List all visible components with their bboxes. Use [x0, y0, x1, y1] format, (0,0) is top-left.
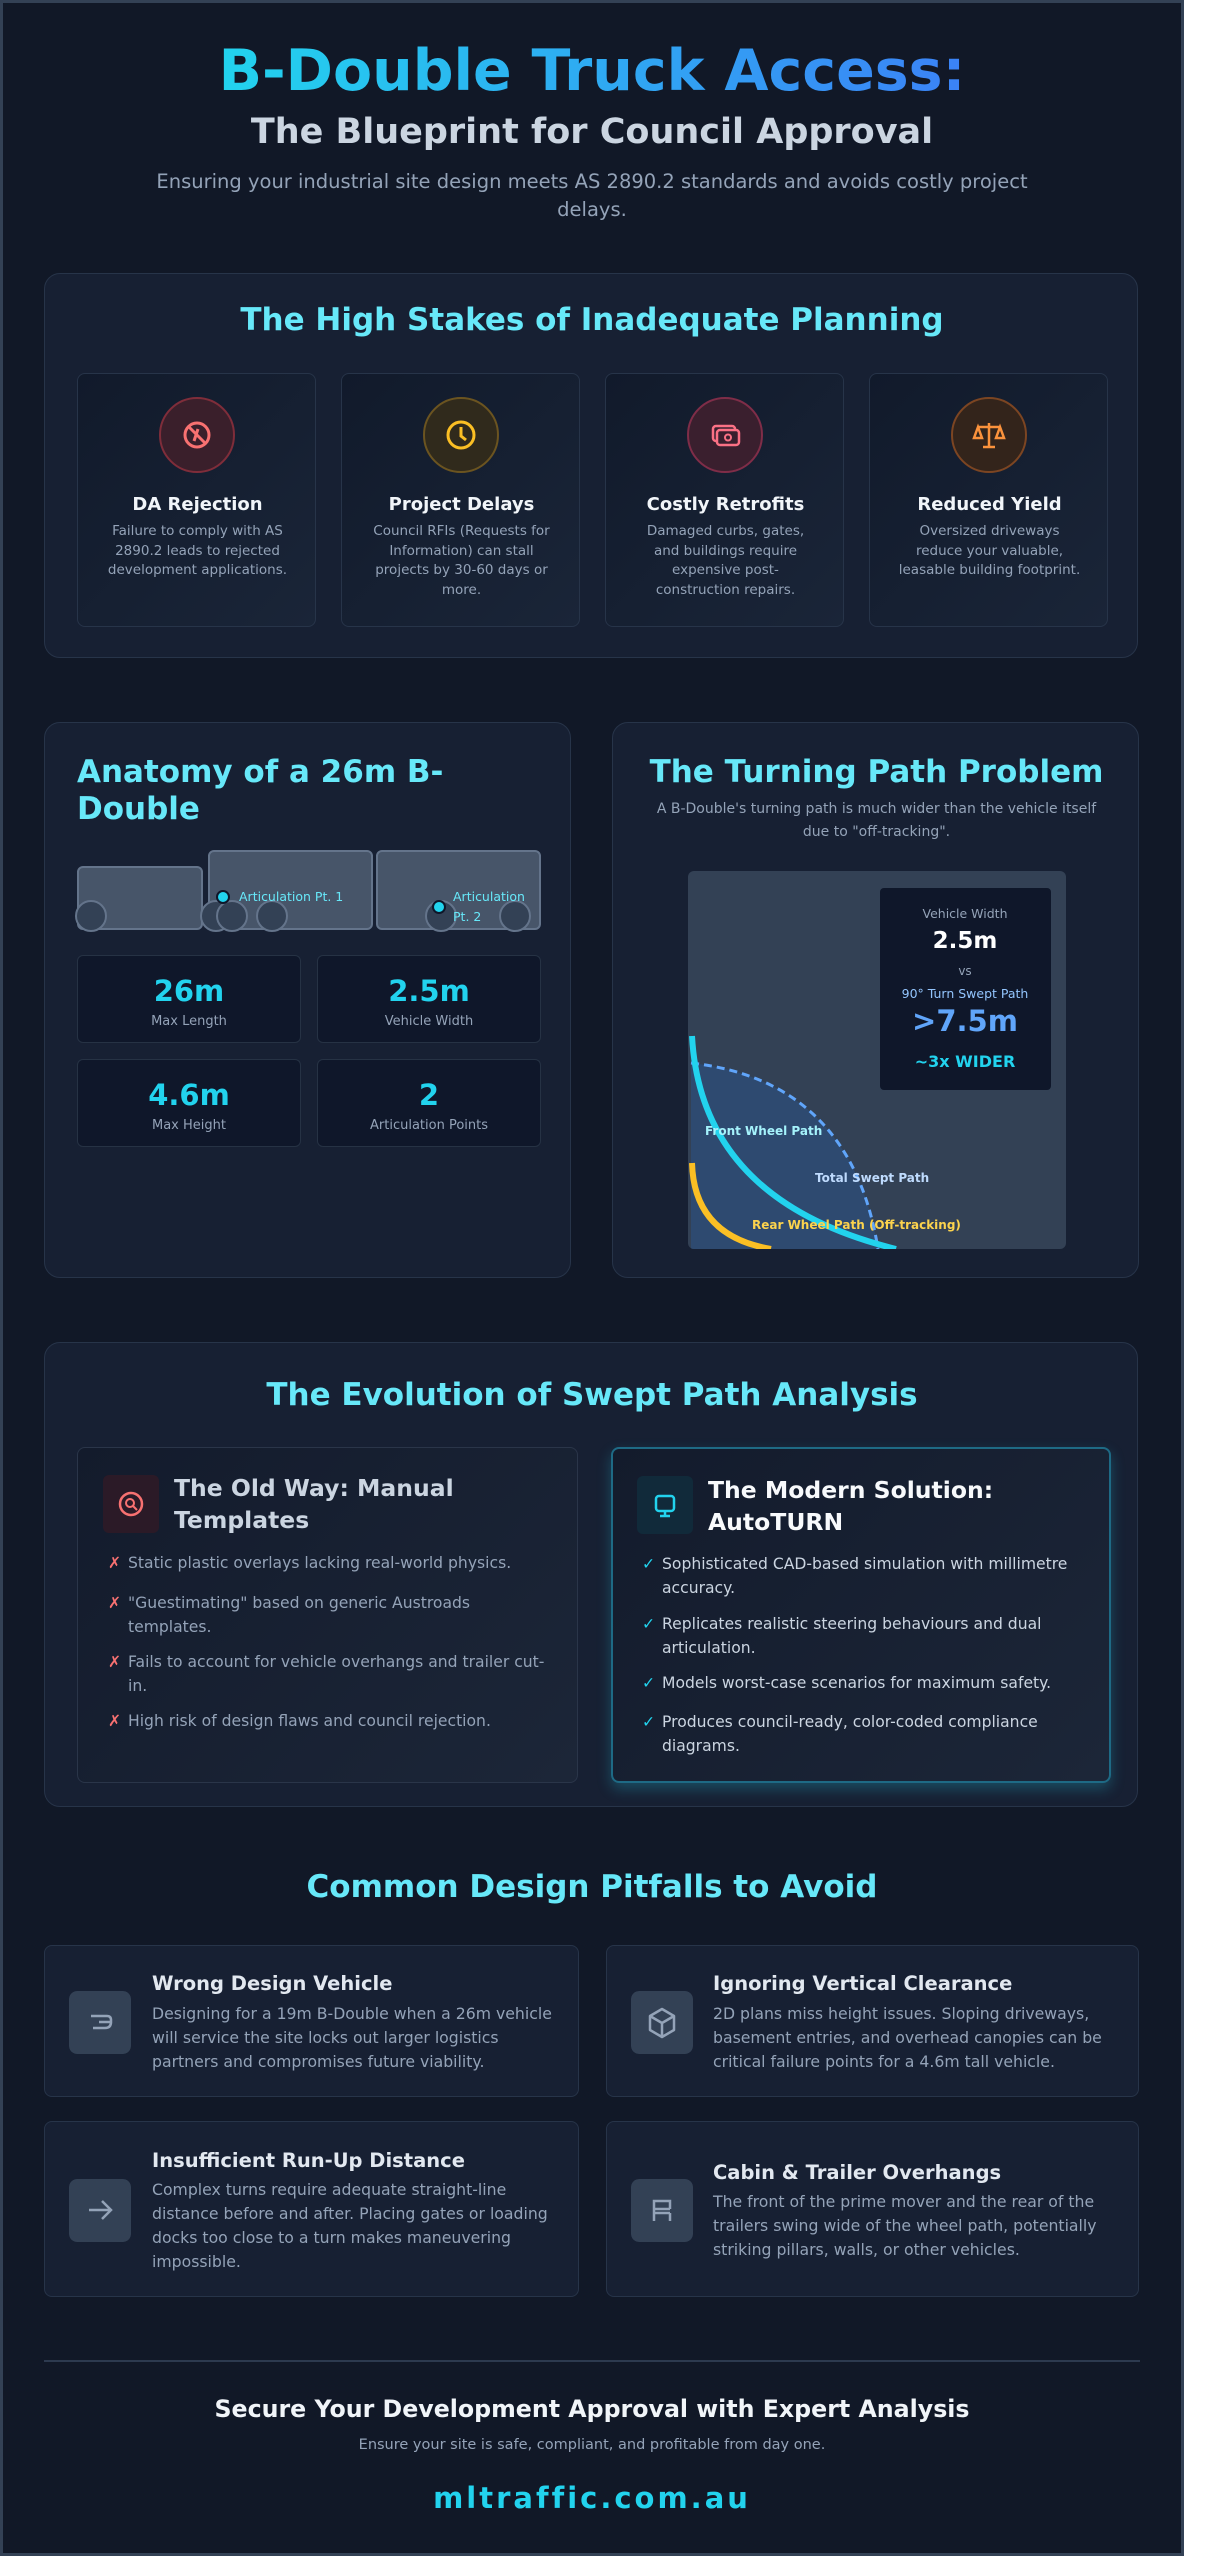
icon: search [103, 1475, 159, 1533]
swept path chart: Rear Wheel Path (Off-tracking) [752, 1218, 961, 1232]
icon: scales [951, 397, 1027, 473]
pitfall: run-up distance: Complex turns require adequate straight-line distance before and after. Placing gates or loading docks too close to a turn makes maneuvering impossible. [152, 2180, 548, 2271]
footer heading: Secure Your Development Approval with Expert Analysis [214, 2395, 970, 2423]
card: costly retrofits: Costly Retrofits [647, 494, 804, 515]
card: project delays: Information) can stall [389, 542, 534, 558]
card: modern solution: Sophisticated CAD-based simulation with millimetre accuracy. [662, 1555, 1067, 1596]
pitfall: vertical clearance: 2D plans miss height issues. Sloping driveways, basement entries, and overhead canopies can be critical failure points for a 4.6m tall vehicle. [713, 2004, 1102, 2071]
card: costly retrofits [605, 373, 844, 627]
stat: width [317, 955, 541, 1043]
pitfall: wrong design vehicle [44, 1945, 579, 2097]
card: old way: High risk of design flaws and council rejection. [128, 1712, 491, 1730]
card: modern solution: Models worst-case scenarios for maximum safety. [662, 1674, 1051, 1692]
truck diagram: Articulation [453, 889, 525, 904]
card: old way: ✗ [108, 1594, 121, 1612]
stat: height: Max Height [152, 1118, 226, 1133]
card: costly retrofits: Damaged curbs, gates, and buildings require expensive post-construction repairs. [647, 523, 804, 598]
panel: turning path [612, 722, 1139, 1278]
card: old way: Fails to account for vehicle overhangs and trailer cut-in. [128, 1653, 544, 1694]
panel: evolution [44, 1342, 1138, 1807]
swept path chart: Front Wheel Path [705, 1124, 822, 1138]
stat: length [77, 955, 301, 1043]
stat: articulation [317, 1059, 541, 1147]
card: project delays: more. [442, 582, 481, 598]
pitfall: vertical clearance: Ignoring Vertical Clearance [713, 1972, 1012, 1995]
icon: truck [69, 1991, 131, 2054]
card: modern solution: ✓ [642, 1674, 655, 1692]
card: old way: "Guestimating" based on generic Austroads templates. [128, 1594, 470, 1636]
swept path chart: Total Swept Path [815, 1171, 929, 1185]
pitfall: vertical clearance [606, 1945, 1139, 2097]
card: modern solution: ✓ [642, 1713, 655, 1731]
swept path chart [688, 871, 1066, 1249]
card: modern solution: ✓ [642, 1615, 655, 1633]
card: old way [77, 1447, 578, 1783]
swept path chart: Vehicle Width [922, 906, 1008, 921]
footer subtext: Ensure your site is safe, compliant, and profitable from day one. [359, 2437, 825, 2453]
icon: monitor [637, 1476, 693, 1534]
pitfall: run-up distance: Insufficient Run-Up Distance [152, 2149, 465, 2172]
stat: width: Vehicle Width [385, 1014, 473, 1029]
subtitle: The Blueprint for Council Approval [251, 112, 933, 152]
pitfall: overhangs: Cabin & Trailer Overhangs [713, 2161, 1001, 2184]
truck diagram: Pt. 2 [453, 909, 481, 924]
panel: high stakes [44, 273, 1138, 658]
swept path chart: 2.5m [933, 928, 997, 954]
heading: turning path: The Turning Path Problem [650, 754, 1103, 790]
icon: cube [631, 1991, 693, 2054]
icon: clock [423, 397, 499, 473]
stat: height [77, 1059, 301, 1147]
card: old way: ✗ [108, 1712, 121, 1730]
icon: overhang [631, 2179, 693, 2242]
description: A B-Double's turning path is much wider than the vehicle itself due to "off-tracking". [657, 801, 1096, 840]
card: old way: Static plastic overlays lacking real-world physics. [128, 1554, 511, 1572]
card: reduced yield: Reduced Yield [917, 494, 1062, 515]
card: modern solution [611, 1447, 1111, 1783]
card: old way: ✗ [108, 1653, 121, 1671]
card: modern solution: Replicates realistic steering behaviours and dual articulation. [662, 1615, 1041, 1656]
card: old way: ✗ [108, 1554, 121, 1572]
truck diagram [75, 850, 541, 932]
stat: articulation: 2 [419, 1078, 439, 1112]
icon: arrow [69, 2179, 131, 2242]
card: modern solution: Produces council-ready, color-coded compliance diagrams. [662, 1713, 1038, 1754]
heading: pitfalls: Common Design Pitfalls to Avoid [307, 1869, 877, 1905]
swept path chart: ~3x WIDER [915, 1052, 1015, 1071]
card: DA rejection: Failure to comply with AS 2890.2 leads to rejected development applications. [108, 523, 287, 578]
pitfall: overhangs: The front of the prime mover and the rear of the trailers swing wide of the wheel path, potentially striking pillars, walls, or other vehicles. [713, 2192, 1097, 2259]
heading: anatomy: Anatomy of a 26m B-Double [77, 754, 443, 827]
truck diagram: Articulation Pt. 1 [239, 889, 343, 904]
card: project delays: projects by 30-60 days or [375, 562, 548, 578]
stat: length: 26m [154, 974, 224, 1008]
card: reduced yield: leasable building footprint. [899, 562, 1080, 578]
icon: rejection [159, 397, 235, 473]
card: reduced yield: Oversized driveways [919, 523, 1060, 539]
card: reduced yield [869, 373, 1108, 627]
icon: money [687, 397, 763, 473]
card: old way: The Old Way: Manual Templates [174, 1474, 454, 1534]
card: project delays: Project Delays [389, 494, 534, 515]
stat: width: 2.5m [388, 974, 470, 1008]
card: project delays [341, 373, 580, 627]
card: modern solution: ✓ [642, 1555, 655, 1573]
title: B-Double Truck Access: [219, 38, 965, 104]
pitfall: run-up distance [44, 2121, 579, 2297]
swept path chart: vs [958, 964, 972, 978]
panel: anatomy [44, 722, 571, 1278]
swept path chart: >7.5m [912, 1004, 1018, 1038]
card: DA rejection [77, 373, 316, 627]
stat: articulation: Articulation Points [370, 1118, 488, 1133]
stat: length: Max Length [151, 1014, 227, 1029]
intro text: Ensuring your industrial site design meets AS 2890.2 standards and avoids costly project delays. [156, 170, 1028, 221]
stat: height: 4.6m [148, 1078, 230, 1112]
card: reduced yield: reduce your valuable, [916, 542, 1063, 558]
heading: evolution: The Evolution of Swept Path Analysis [266, 1377, 918, 1413]
pitfall: wrong design vehicle: Wrong Design Vehicle [152, 1972, 392, 1995]
footer url: mltraffic.com.au [433, 2481, 751, 2515]
heading: high stakes: The High Stakes of Inadequate Planning [240, 302, 944, 338]
card: project delays: Council RFIs (Requests for [373, 523, 550, 539]
pitfall: wrong design vehicle: Designing for a 19m B-Double when a 26m vehicle will service the site locks out larger logistics partners and compromises future viability. [152, 2004, 552, 2071]
card: modern solution: The Modern Solution: AutoTURN [708, 1476, 993, 1536]
pitfall: overhangs [606, 2121, 1139, 2297]
card: DA rejection: DA Rejection [132, 494, 263, 515]
swept path chart: 90° Turn Swept Path [902, 986, 1028, 1001]
